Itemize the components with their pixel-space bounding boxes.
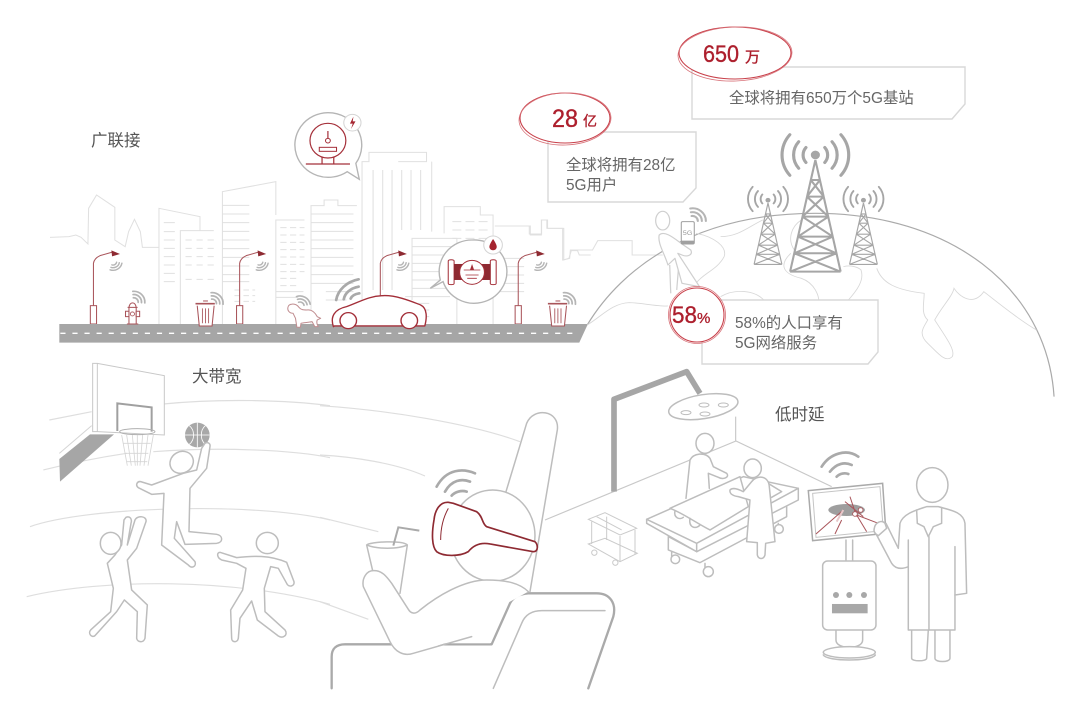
icon: dog xyxy=(288,293,321,327)
callout text 58%: 5G网络服务 xyxy=(735,334,817,352)
surgeon front xyxy=(730,459,775,558)
wifi above monitor xyxy=(822,453,858,477)
heading: 大带宽: 大带宽 xyxy=(192,367,242,386)
callout: 28亿 users xyxy=(518,91,696,202)
badge: 58%: % xyxy=(697,310,710,327)
surgical monitor xyxy=(808,483,886,541)
armchair xyxy=(332,593,614,688)
badge: 650万 xyxy=(677,25,793,83)
globe outline xyxy=(587,213,1054,397)
small tower right xyxy=(843,187,883,264)
city skyline buildings xyxy=(50,152,591,324)
heading: 广联接: 广联接 xyxy=(91,131,140,150)
backboard and strut xyxy=(59,363,164,482)
badge: 650万: 650 xyxy=(703,41,739,68)
doctor xyxy=(874,468,967,662)
left defender xyxy=(90,517,147,642)
city scene: wide connectivity xyxy=(50,113,591,343)
callout box 28亿 xyxy=(548,132,696,202)
VR headset xyxy=(432,502,537,555)
icon: fire hydrant xyxy=(126,289,148,324)
VR viewer scene xyxy=(320,406,614,688)
badge: 28亿: 28 xyxy=(552,105,578,133)
icon: trash bins xyxy=(196,290,578,326)
callout text 28亿: 全球将拥有28亿 xyxy=(566,156,675,174)
main tower xyxy=(782,135,849,272)
viewer body and arm xyxy=(363,571,528,654)
drink cup xyxy=(367,527,419,593)
callout text 28亿: 5G用户 xyxy=(566,176,617,194)
heading: 低时延: 低时延 xyxy=(775,405,824,424)
operating table xyxy=(647,477,798,577)
stadium stand lines xyxy=(27,400,330,604)
street lamps xyxy=(90,250,548,324)
right player xyxy=(218,532,294,642)
hoop and net xyxy=(120,429,155,466)
basketball xyxy=(185,423,210,447)
callout: 650万 base stations xyxy=(677,25,965,119)
badge: 28亿: 亿 xyxy=(583,113,597,129)
person with 5G phone: 5G xyxy=(683,230,692,237)
distant skyline right xyxy=(510,220,663,260)
instrument cart xyxy=(588,513,637,562)
surgical lamp xyxy=(667,389,740,424)
jumping player xyxy=(137,443,222,567)
person with 5G phone xyxy=(656,205,709,293)
room floor lines xyxy=(545,417,832,520)
monitor stand xyxy=(823,540,876,660)
badge: 58%: 58 xyxy=(672,302,697,329)
callout text 58%: 58%的人口享有 xyxy=(735,314,843,332)
car xyxy=(332,296,426,329)
icon: wifi above car xyxy=(336,279,359,300)
badge: 58% xyxy=(668,286,726,344)
bubble: water meter xyxy=(430,236,507,303)
viewer head xyxy=(450,490,535,581)
continents xyxy=(587,220,1036,359)
chair headrest xyxy=(506,413,557,592)
badge: 28亿 xyxy=(518,91,612,147)
cart wheels xyxy=(592,550,618,565)
badge: 650万: 万 xyxy=(745,49,760,66)
road xyxy=(59,324,588,343)
globe scene with towers xyxy=(510,135,1054,397)
small tower left xyxy=(748,187,788,264)
callout box 58% xyxy=(702,300,878,364)
callout text 650万: 全球将拥有650万个5G基站 xyxy=(729,89,914,107)
stadium stand lines right xyxy=(320,406,520,619)
surgeon back xyxy=(686,433,728,498)
basketball scene xyxy=(27,363,330,642)
surgical lamp arm xyxy=(614,372,700,492)
callout box 650万 xyxy=(692,67,965,119)
operating room scene xyxy=(545,372,967,662)
wifi above VR xyxy=(437,470,475,496)
callout: 58% population xyxy=(668,286,878,364)
bubble: electricity meter xyxy=(295,113,362,179)
